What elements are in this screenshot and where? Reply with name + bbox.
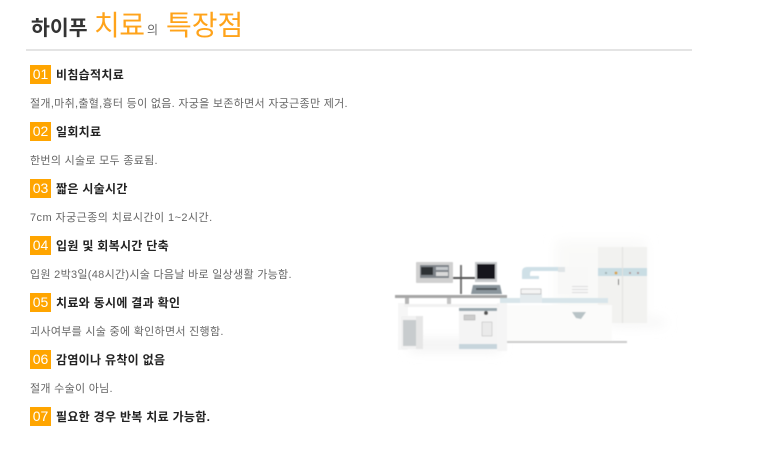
title: 치료 <box>94 10 145 41</box>
item 04: 입원 2박3일(48시간)시술 다음날 바로 일상생활 가능함. <box>30 269 292 281</box>
title <box>31 10 243 41</box>
item 02: 일회치료 <box>56 125 101 139</box>
title: 의 <box>147 23 158 37</box>
right monitor <box>475 262 497 282</box>
item 06: 절개 수술이 아님. <box>30 383 113 395</box>
treatment cabinet <box>598 247 647 323</box>
item 07 <box>30 407 210 426</box>
HIFU treatment equipment illustration <box>394 246 648 350</box>
item 03: 짧은 시술시간 <box>56 182 128 196</box>
item 03 <box>30 179 213 224</box>
control console <box>471 285 502 294</box>
item 05: 05 <box>33 294 48 310</box>
gantry arm <box>522 267 588 294</box>
title underline <box>26 49 692 51</box>
item 02: 한번의 시술로 모두 종료됨. <box>30 155 158 167</box>
item 01: 01 <box>33 66 48 82</box>
item 03: 03 <box>33 180 48 196</box>
left monitor <box>416 262 453 283</box>
item 01 <box>30 65 348 110</box>
item 03: 7cm 자궁근종의 치료시간이 1~2시간. <box>30 212 213 224</box>
monitor pole <box>453 265 475 294</box>
title: 특장점 <box>166 10 243 41</box>
item 05 <box>30 293 224 338</box>
item 06 <box>30 350 165 395</box>
item 05: 치료와 동시에 결과 확인 <box>56 296 180 310</box>
title: 하이푸 <box>31 17 88 40</box>
item 04: 입원 및 회복시간 단축 <box>56 239 169 253</box>
computer tower <box>401 316 423 349</box>
item 07: 07 <box>33 408 48 424</box>
patient table <box>497 289 627 343</box>
item 02 <box>30 122 158 167</box>
item 02: 02 <box>33 123 48 139</box>
item 01: 비침습적치료 <box>56 68 124 82</box>
center control unit <box>459 308 497 349</box>
background glow and floor shadow <box>410 240 665 350</box>
item 04 <box>30 236 292 281</box>
item 04: 04 <box>33 237 48 253</box>
item 06: 06 <box>33 351 48 367</box>
item 01: 절개,마취,출혈,흉터 등이 없음. 자궁을 보존하면서 자궁근종만 제거. <box>30 98 348 110</box>
item 06: 감염이나 유착이 없음 <box>56 353 165 367</box>
desk top and supports <box>395 295 507 351</box>
item 07: 필요한 경우 반복 치료 가능함. <box>56 410 210 424</box>
item 05: 괴사여부를 시술 중에 확인하면서 진행함. <box>30 326 224 338</box>
